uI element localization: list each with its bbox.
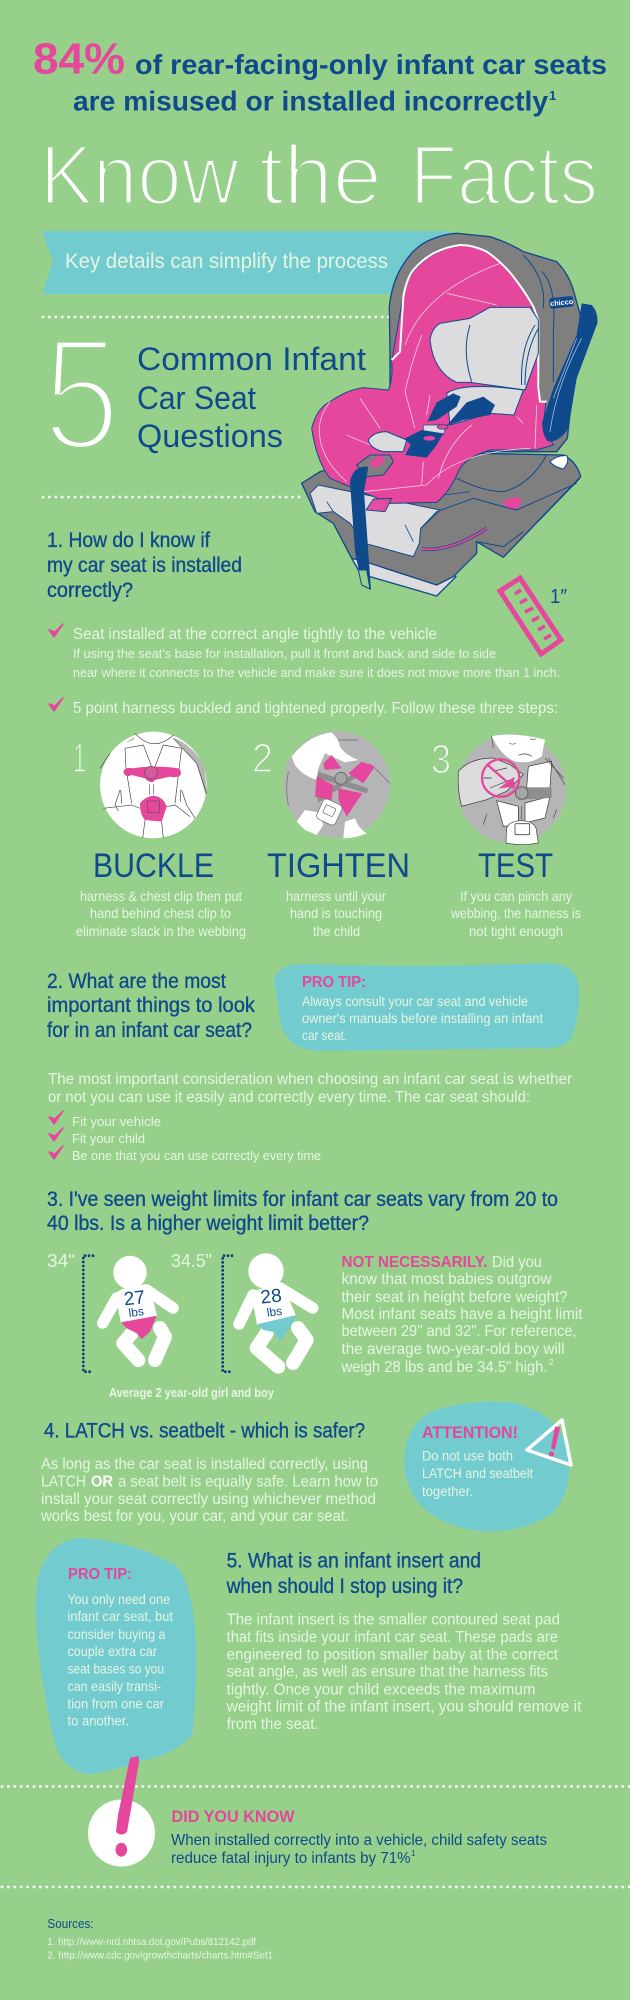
baby figure: girl: 27 (123, 1287, 146, 1310)
chart: average girl height and weight (47, 1251, 173, 1372)
text block: LATCH or seat belt (40, 1456, 378, 1525)
sources: 1. http://www-nrd.nhtsa.dot.gov/Pubs/812142.pdf (47, 1936, 256, 1948)
panel: pro tip about extra bases: consider buying a (68, 1626, 166, 1642)
banner: key details: Key details can simplify the process (65, 250, 388, 273)
checklist: the car seat should: Fit your child (72, 1131, 145, 1146)
icon: check mark (49, 1146, 63, 1159)
title: Know the Facts: Facts (410, 128, 598, 222)
text block: infant insert: weight limit of the infant insert, you should remove it (226, 1698, 582, 1716)
panel: pro tip about manuals: PRO TIP: (302, 974, 366, 991)
sources: 2. http://www.cdc.gov/growthcharts/charts.htm#Set1 (47, 1950, 273, 1962)
text block: not necessarily: Most infant seats have a height limit (342, 1306, 583, 1323)
headline statistic: 1 (549, 88, 556, 103)
icon: warning triangle (527, 1420, 571, 1465)
question 1 heading: correctly? (47, 579, 133, 602)
baby figure: boy (239, 1253, 313, 1367)
text block: not necessarily: weigh 28 lbs and be 34.5" high. (341, 1359, 548, 1376)
callout: did you know: 1 (411, 1849, 416, 1858)
checklist: installation: If using the seat's base for installation, pull it front and back and side to side (73, 646, 496, 661)
checklist: installation (49, 624, 560, 717)
step 3: test: If you can pinch any (460, 888, 572, 904)
baby figure: boy: lbs (266, 1304, 283, 1320)
text block: infant insert: seat angle, as well as ensure that the harness fits (227, 1664, 548, 1681)
illustration: infant car seat: chicco (550, 297, 574, 308)
title: Know the Facts: Know (40, 128, 239, 222)
illustration: infant car seat (302, 233, 597, 596)
section heading: 5 common questions (43, 304, 366, 483)
icon: pink ruler (500, 578, 561, 654)
text block: not necessarily: NOT NECESSARILY. (342, 1254, 488, 1271)
checklist: the car seat should: Be one that you can use correctly every time (72, 1148, 321, 1163)
question 5 heading: 5. What is an infant insert and (227, 1550, 481, 1573)
icon: check mark (49, 1128, 63, 1141)
icon: exclamation mark in circle (88, 1756, 155, 1866)
checklist: the car seat should: Fit your vehicle (72, 1114, 161, 1129)
text block: not necessarily: know that most babies outgrow (342, 1271, 552, 1288)
title: Know the Facts (40, 128, 598, 222)
step 3: test: TEST (478, 847, 553, 885)
text block: LATCH or seat belt: install your seat correctly using whichever method (41, 1491, 376, 1508)
text block: most important consideration: or not you can use it easily and correctly every time. The car seat should: (48, 1089, 530, 1106)
baby figure: girl: lbs (128, 1304, 145, 1320)
text block: not necessarily (341, 1254, 583, 1376)
label: one inch: 1″ (550, 586, 567, 608)
icon: check mark (49, 1111, 63, 1124)
question 2 heading (47, 970, 255, 1042)
text block: not necessarily: Did you (492, 1254, 542, 1271)
question 5 heading: when should I stop using it? (226, 1575, 463, 1598)
panel: pro tip about manuals: owner's manuals before installing an infant (302, 1011, 543, 1026)
question 5 heading (226, 1550, 481, 1598)
text block: LATCH or seat belt: LATCH (41, 1474, 86, 1490)
step 2: tighten: harness until your (286, 888, 386, 904)
text block: infant insert: from the seat. (227, 1716, 319, 1733)
callout: did you know: DID YOU KNOW (172, 1808, 295, 1826)
section heading: 5 common questions: Car Seat (137, 380, 256, 416)
section heading: 5 common questions: 5 (43, 304, 120, 483)
step 2: tighten: 2 (252, 735, 273, 781)
headline statistic (33, 34, 607, 117)
text block: most important consideration: The most important consideration when choosing an infant car seat is whether (48, 1071, 572, 1088)
panel: pro tip about extra bases: seat bases so you (68, 1661, 164, 1677)
panel: pro tip about extra bases: can easily transi- (68, 1678, 161, 1694)
question 2 heading: 2. What are the most (47, 970, 226, 993)
panel: pro tip about extra bases: to another. (68, 1713, 129, 1729)
text block: infant insert (226, 1612, 582, 1733)
panel: pro tip about manuals: car seat. (302, 1028, 347, 1043)
question 1 heading: my car seat is installed (47, 554, 242, 577)
text block: infant insert: engineered to position smaller baby at the correct (227, 1646, 559, 1664)
question 2 heading: for in an infant car seat? (47, 1019, 252, 1042)
step 3: test (431, 734, 581, 939)
panel: pro tip about extra bases: You only need one (68, 1591, 170, 1607)
step 2: tighten: hand is touching (290, 905, 382, 921)
illustration: buckling the chest clip (100, 732, 207, 838)
text block: LATCH or seat belt: a seat belt is equally safe. Learn how to (118, 1474, 378, 1490)
checklist: installation: Seat installed at the correct angle tightly to the vehicle (73, 626, 437, 643)
banner: key details (42, 231, 450, 294)
text block: not necessarily: 2 (549, 1358, 554, 1367)
text block: most important consideration (48, 1071, 572, 1106)
panel: attention callout (404, 1402, 571, 1531)
baby figure: boy: 28 (260, 1285, 283, 1309)
chart: average boy height and weight (171, 1251, 313, 1372)
step 2: tighten (252, 731, 410, 939)
text block: not necessarily: the average two-year-old boy will (342, 1341, 564, 1358)
panel: pro tip about extra bases: couple extra car (68, 1643, 157, 1659)
text block: LATCH or seat belt: OR (91, 1474, 113, 1490)
panel: pro tip about extra bases: infant car seat, but (68, 1608, 173, 1624)
callout: did you know: When installed correctly into a vehicle, child safety seats (171, 1832, 547, 1849)
text block: not necessarily: between 29" and 32". For reference, (342, 1323, 576, 1340)
step 3: test: not tight enough (469, 923, 563, 939)
chart caption: Average 2 year-old girl and boy (109, 1385, 275, 1400)
baby figure: girl (103, 1256, 173, 1360)
step 1: buckle: harness & chest clip then put (80, 888, 242, 904)
panel: pro tip about manuals (274, 963, 579, 1051)
step 1: buckle: eliminate slack in the webbing (76, 923, 246, 939)
step 1: buckle: BUCKLE (93, 847, 214, 885)
text block: LATCH or seat belt: works best for you, your car, and your car seat. (40, 1508, 349, 1525)
text block: infant insert: tightly. Once your child exceeds the maximum (227, 1681, 536, 1698)
callout: did you know (171, 1808, 547, 1867)
question 2 heading: important things to look (47, 994, 255, 1017)
text block: not necessarily: their seat in height before weight? (342, 1289, 568, 1306)
chart: average girl height and weight: 34" (47, 1251, 75, 1271)
illustration: tightening the harness (283, 731, 390, 838)
headline statistic: of rear-facing-only infant car seats (135, 49, 607, 80)
headline statistic: are misused or installed incorrectly (73, 86, 548, 117)
step 1: buckle: hand behind chest clip to (90, 905, 231, 921)
checklist: installation: 5 point harness buckled and tightened properly. Follow these three steps: (73, 700, 558, 717)
panel: pro tip about extra bases: PRO TIP: (68, 1566, 132, 1583)
question 3 heading: 40 lbs. Is a higher weight limit better? (47, 1212, 369, 1235)
question 4 heading: 4. LATCH vs. seatbelt - which is safer? (44, 1420, 365, 1442)
panel: pro tip about extra bases (36, 1538, 196, 1774)
chart: average boy height and weight: 34.5" (171, 1251, 212, 1271)
step 2: tighten: the child (313, 923, 360, 939)
text block: infant insert: The infant insert is the smaller contoured seat pad (227, 1612, 560, 1629)
sources (47, 1916, 273, 1962)
step 3: test: webbing, the harness is (450, 905, 581, 921)
section heading: 5 common questions: Questions (137, 418, 283, 454)
step 3: test: 3 (431, 736, 451, 782)
checklist: the car seat should (49, 1111, 321, 1163)
panel: attention callout: together. (422, 1483, 473, 1499)
step 1: buckle: 1 (73, 735, 86, 781)
question 1 heading (47, 529, 242, 602)
step 2: tighten: TIGHTEN (267, 847, 410, 885)
checklist: installation: near where it connects to the vehicle and make sure it does not move more than 1 inch. (73, 665, 560, 680)
text block: infant insert: that fits inside your infant car seat. These pads are (227, 1629, 558, 1646)
section heading: 5 common questions: Common Infant (137, 341, 366, 377)
illustration: pinch test (457, 734, 566, 845)
icon: check mark (49, 624, 63, 637)
question 3 heading (47, 1188, 558, 1235)
icon: check mark (49, 698, 63, 711)
question 1 heading: 1. How do I know if (47, 529, 210, 552)
panel: pro tip about extra bases: tion from one car (68, 1696, 164, 1712)
headline statistic: 84% (33, 34, 125, 84)
panel: attention callout: Do not use both (422, 1448, 513, 1464)
panel: pro tip about manuals: Always consult your car seat and vehicle (302, 994, 528, 1009)
step 1: buckle (73, 732, 246, 939)
sources: Sources: (47, 1916, 94, 1931)
panel: attention callout: LATCH and seatbelt (422, 1465, 533, 1481)
text block: LATCH or seat belt: As long as the car seat is installed correctly, using (41, 1456, 368, 1473)
question 3 heading: 3. I've seen weight limits for infant car seats vary from 20 to (47, 1188, 558, 1211)
panel: attention callout: ATTENTION! (422, 1423, 518, 1442)
callout: did you know: reduce fatal injury to infants by 71% (171, 1850, 411, 1867)
title: Know the Facts: the (259, 128, 382, 222)
